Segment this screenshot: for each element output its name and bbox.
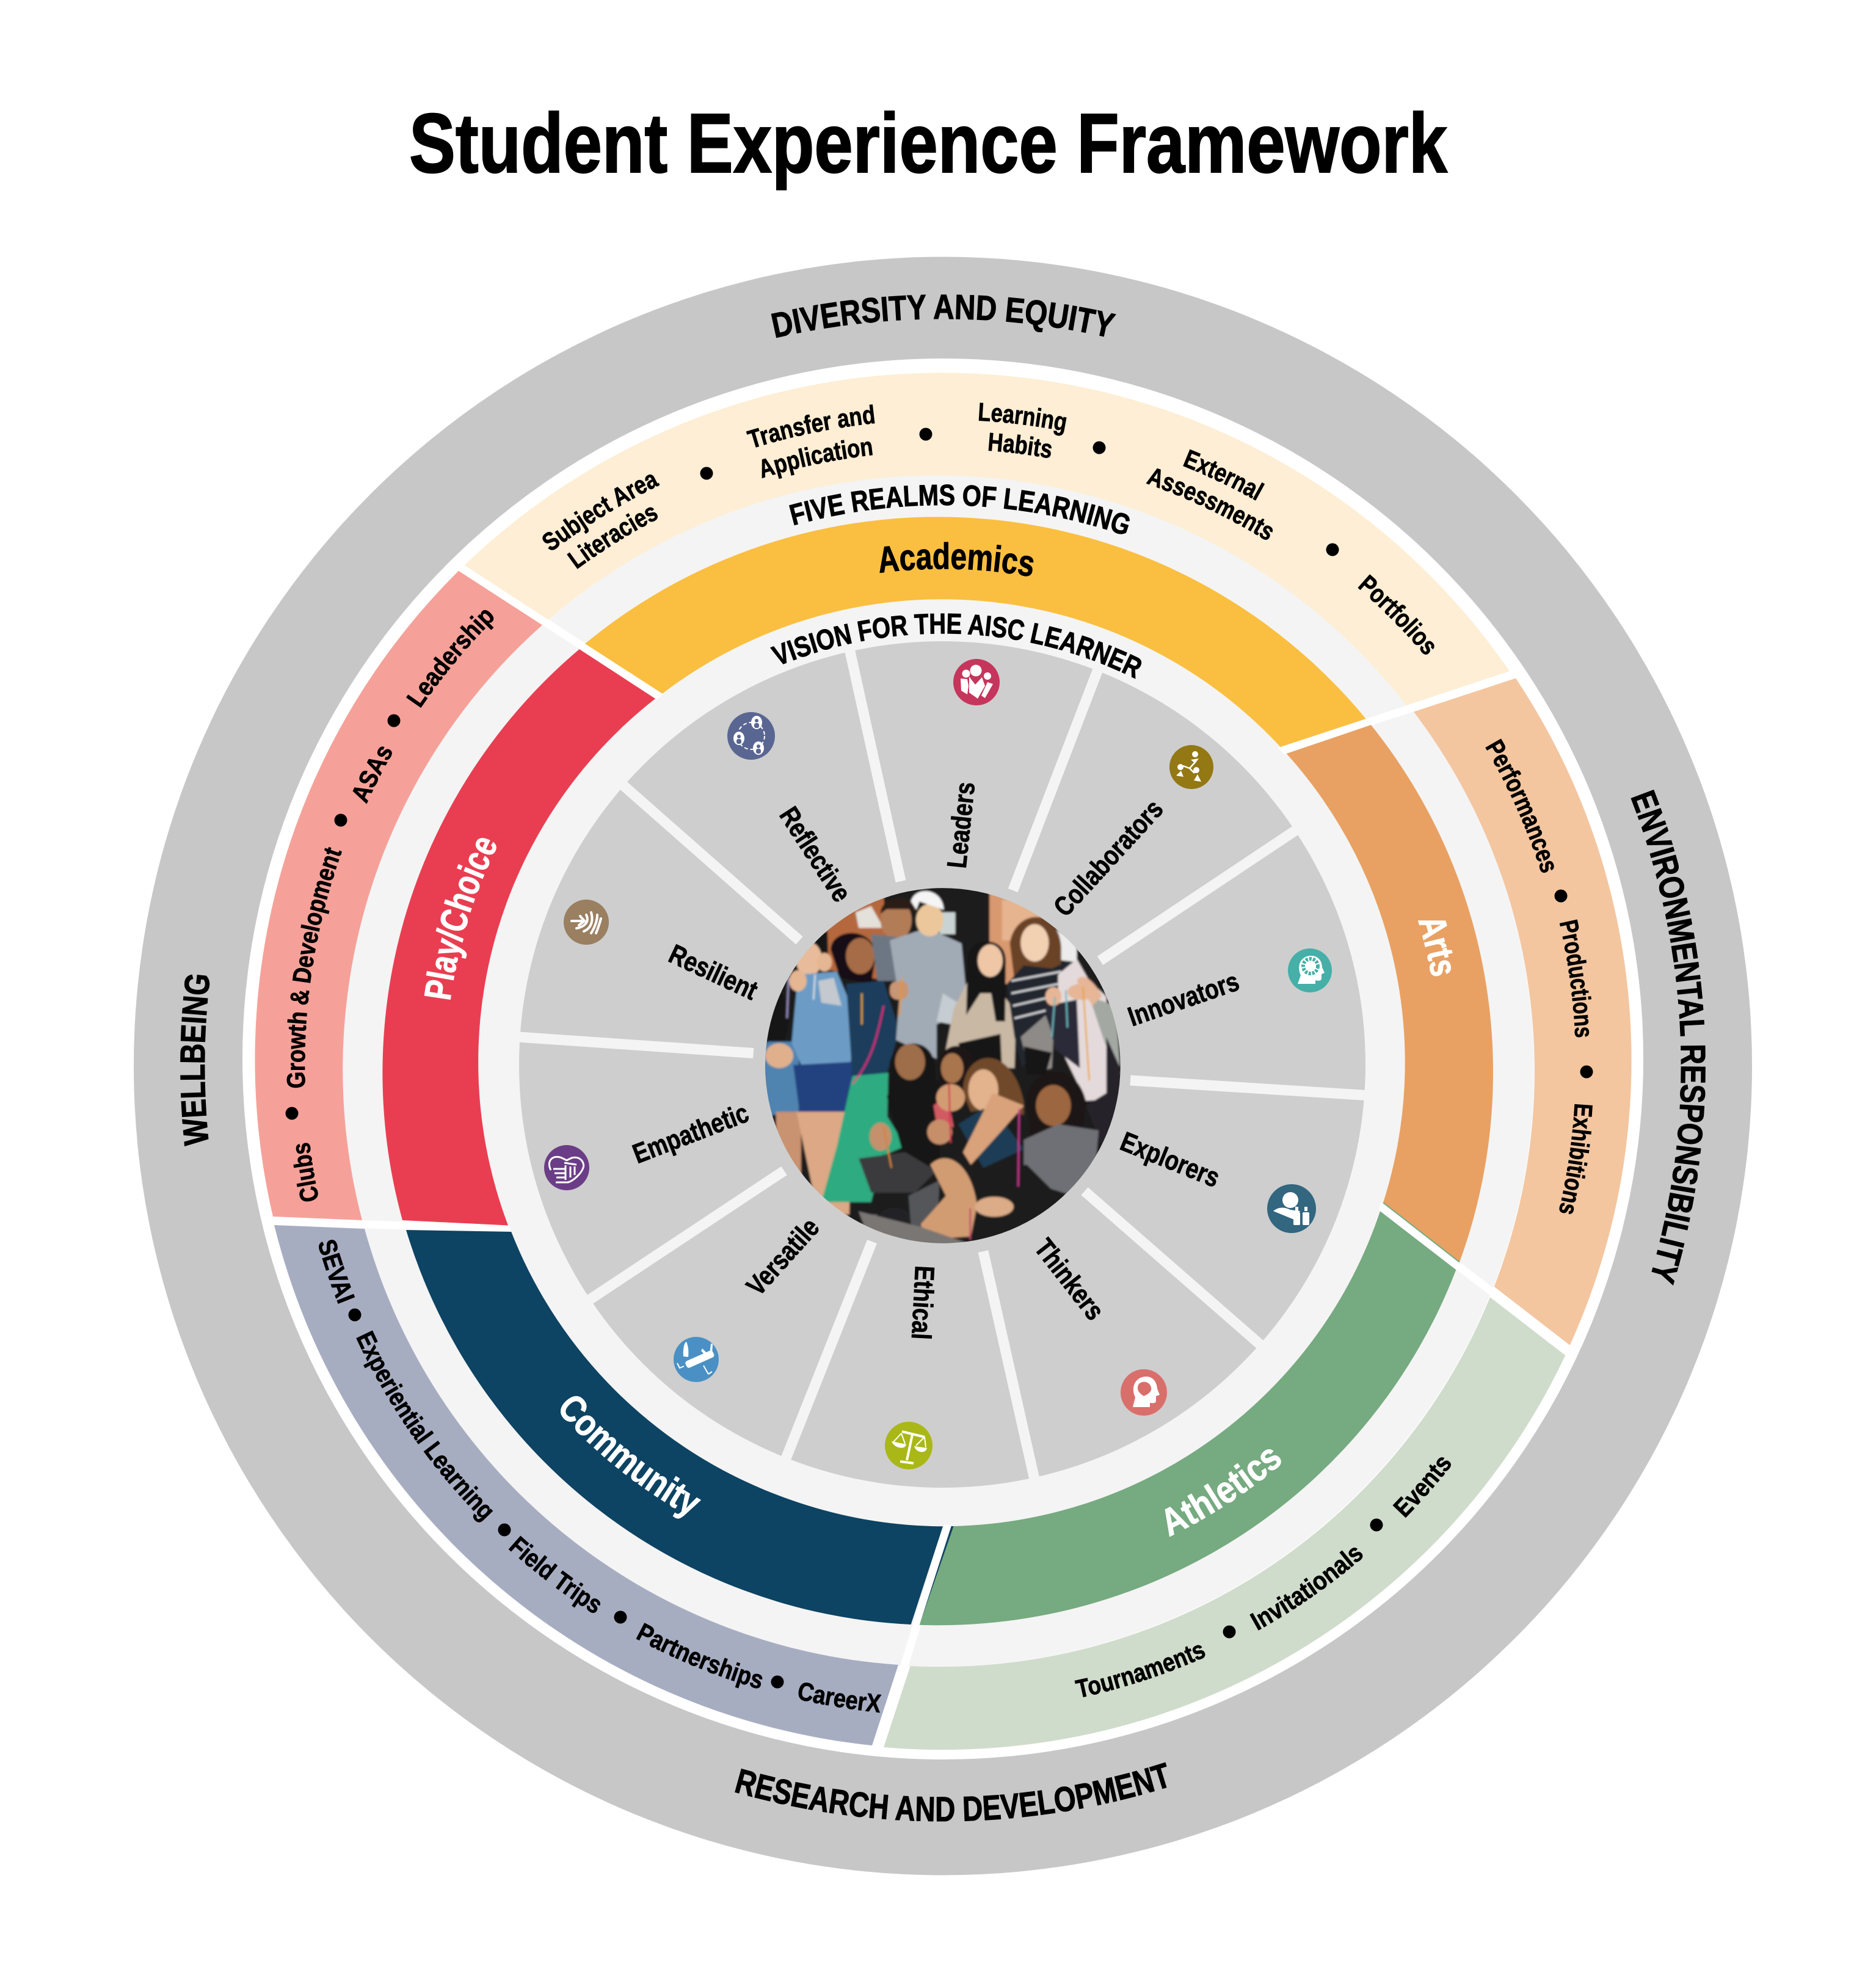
word: leaders: Leaders (941, 780, 981, 870)
item: external assessments: External (1183, 449, 1265, 501)
item: subject area literacies: Subject Area (542, 474, 660, 550)
item: learning habits: Habits (988, 432, 1052, 458)
icon: leaders group (953, 659, 1000, 705)
word: explorers: Explorers (1116, 1126, 1224, 1193)
item: invitationals: Invitationals (1249, 1548, 1363, 1631)
panel: learner vision wheel (514, 641, 1371, 1488)
icon: empathetic heart and hands (544, 1145, 589, 1190)
ring label: wellbeing: WELLBEING (180, 975, 210, 1147)
word: ethical: Ethical (906, 1265, 940, 1341)
item: learning habits: Learning (978, 402, 1067, 436)
item: careerx: CareerX (799, 1683, 882, 1712)
item: partnerships: Partnerships (636, 1623, 762, 1689)
item: growth and development: Growth & Development (271, 842, 348, 1093)
icon: reflective cycle (727, 712, 775, 760)
heading: vision for the AISC learner: VISION FOR THE AISC LEARNER (767, 601, 1148, 685)
panel: academics outcomes band (465, 373, 1510, 705)
icon: collaborators network (1169, 745, 1213, 789)
panel: play and choice outcomes band (255, 571, 542, 1220)
item: transfer and application (744, 397, 879, 484)
heading: five realms of learning: FIVE REALMS OF LEARNING (785, 474, 1135, 542)
item: events: Events (1392, 1457, 1451, 1518)
item: transfer and application: Application (762, 440, 873, 479)
realm: arts (1287, 725, 1493, 1262)
item: clubs: Clubs (293, 1143, 318, 1202)
realm: athletics: Athletics (1150, 1433, 1292, 1548)
item: transfer and application: Transfer and (746, 404, 875, 448)
icon: versatile pocket knife (674, 1337, 719, 1382)
word: thinkers: Thinkers (1028, 1233, 1110, 1326)
icon: innovators head with gear (1288, 948, 1332, 992)
icon: ethical scales (885, 1422, 933, 1469)
realm: athletics (920, 1202, 1460, 1625)
word: innovators: Innovators (1124, 966, 1243, 1032)
realm: arts: Arts (1409, 911, 1466, 981)
item: ASAs: ASAs (344, 740, 399, 807)
item: tournaments: Tournaments (1075, 1645, 1205, 1698)
word: empathetic: Empathetic (628, 1097, 753, 1170)
icon: resilient arrow and waves (564, 900, 609, 945)
realm: community (406, 1230, 943, 1625)
icon: explorers person with binoculars (1267, 1184, 1316, 1233)
photo: group of students holding bracelets (765, 888, 1121, 1243)
ring label: research and development: RESEARCH AND DEVELOPMENT (735, 1763, 1167, 1821)
item: exhibitions: Exhibitions (1559, 1104, 1593, 1214)
title: Student Experience Framework (409, 96, 1447, 191)
realm: community: Community (545, 1382, 713, 1531)
ring label: diversity and equity: DIVERSITY AND EQUITY (771, 294, 1116, 338)
icon: thinkers head with brain (1121, 1369, 1167, 1416)
realm: academics: Academics (874, 534, 1038, 585)
item: portfolios: Portfolios (1358, 574, 1434, 655)
item: field trips: Field Trips (508, 1535, 600, 1614)
word: resilient: Resilient (664, 938, 763, 1006)
item: subject area literacies: Literacies (567, 507, 658, 569)
item: productions: Productions (1560, 920, 1591, 1037)
item: SEVAI: SEVAI (319, 1240, 355, 1304)
realm: play and choice (382, 649, 655, 1225)
item: external assessments: Assessments (1146, 468, 1273, 540)
panel: athletics outcomes band (884, 1297, 1565, 1750)
item: learning habits (976, 396, 1070, 464)
panel: arts outcomes band (1414, 678, 1632, 1345)
item: performances: Performances (1485, 738, 1554, 873)
ring label: environmental responsibility: ENVIRONMENTAL RESPONSIBILITY (1631, 789, 1706, 1286)
word: reflective: Reflective (774, 801, 857, 908)
word: versatile: Versatile (740, 1212, 825, 1301)
item: leadership: Leadership (399, 599, 501, 714)
realm: play and choice: Play/Choice (410, 827, 508, 1009)
word: collaborators: Collaborators (1047, 793, 1169, 922)
realm: academics (585, 517, 1366, 747)
item: experiential learning: Experiential Learning (356, 1330, 493, 1523)
panel: community outcomes band (274, 1225, 898, 1745)
outer ring: cross-cutting themes (134, 257, 1752, 1875)
